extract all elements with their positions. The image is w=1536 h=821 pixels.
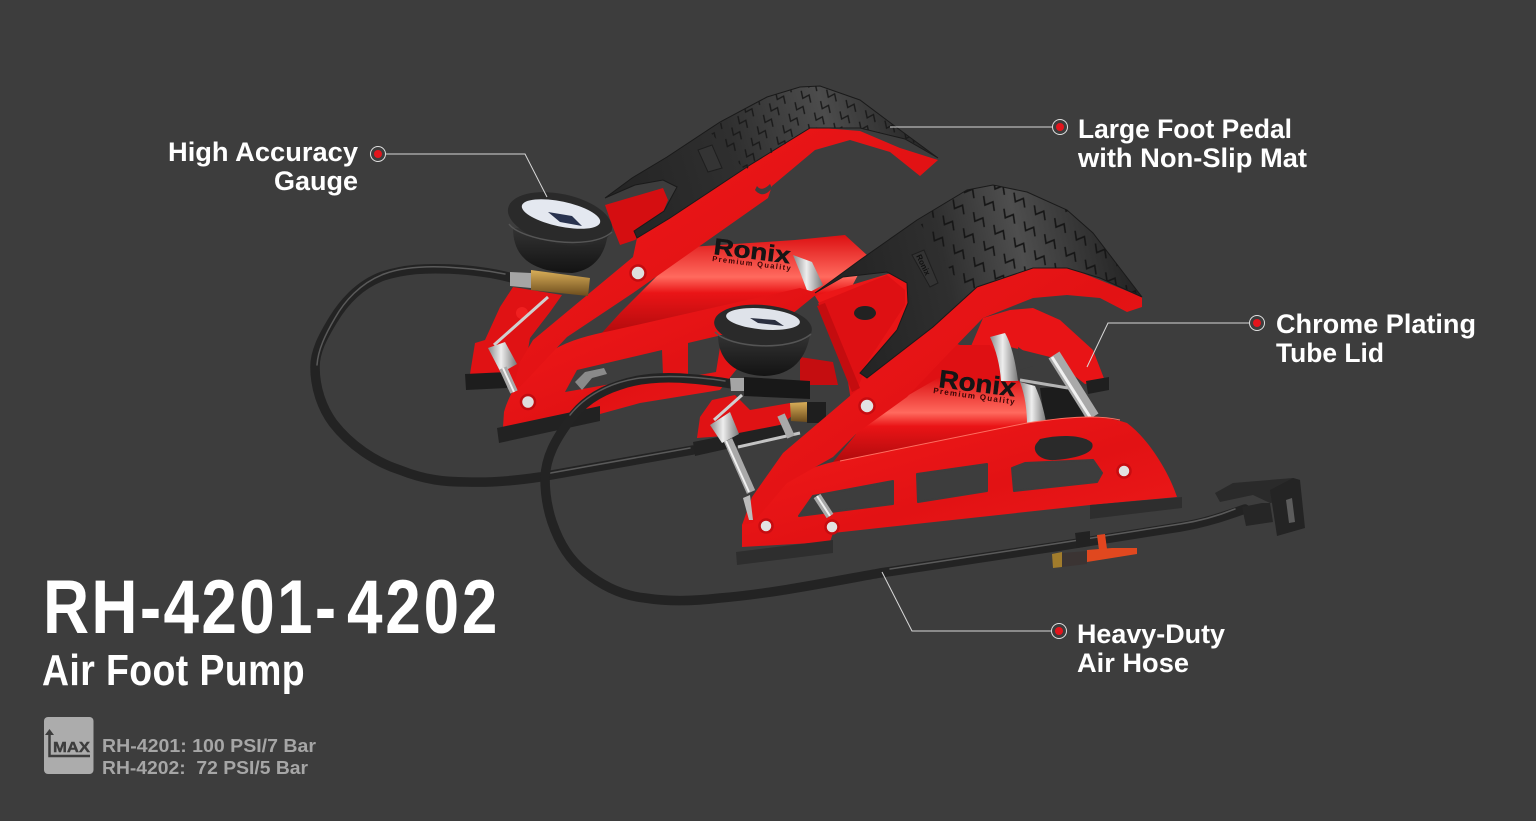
pedal label: Large Foot Pedal	[1078, 114, 1292, 144]
chrome label: Tube Lid	[1276, 338, 1384, 368]
rear mat tread	[708, 86, 938, 170]
pressure specs	[102, 736, 316, 778]
front pedal arm	[742, 240, 1142, 525]
front base windows	[799, 460, 1102, 516]
rear spring rod	[488, 297, 548, 392]
front mat tread	[918, 185, 1140, 296]
callout: high accuracy gauge	[168, 137, 547, 197]
callout: heavy-duty air hose	[882, 572, 1225, 678]
front non-slip mat	[815, 185, 1142, 378]
front left far frame	[697, 395, 800, 438]
callout: chrome plating tube lid	[1087, 309, 1476, 368]
pedal leader line	[890, 126, 1052, 128]
chrome leader line	[1087, 323, 1249, 367]
rear frame knob	[516, 307, 528, 319]
rear brass connector	[510, 270, 590, 296]
mat brand badge: Ronix	[914, 253, 932, 277]
rear pedal arm	[513, 127, 938, 388]
rear air hose	[315, 267, 693, 482]
front main cylinder	[833, 377, 1030, 462]
front connector	[730, 377, 810, 399]
icon: max pressure: MAX	[53, 739, 90, 756]
front arc window	[1018, 347, 1033, 370]
rear far side frame	[470, 287, 562, 385]
front base top highlight	[840, 417, 1120, 461]
hose air-tip adapter	[1052, 531, 1137, 568]
front pressure gauge	[712, 301, 814, 376]
rear base windows	[565, 350, 663, 392]
front pivot bolts	[760, 398, 1130, 534]
front chrome lid one	[990, 333, 1018, 381]
hose marker	[1052, 624, 1066, 638]
front base plate	[742, 417, 1177, 547]
rear base plate	[503, 288, 818, 427]
front foot pump	[693, 185, 1182, 565]
pressure specs: RH-4201: 100 PSI/7 Bar	[102, 736, 316, 756]
rear pivot bolts	[521, 266, 646, 409]
rear foot pump	[465, 86, 938, 443]
front rear-side foot	[1086, 377, 1109, 394]
front rubber plug	[1035, 436, 1093, 460]
rear arm notch	[755, 184, 772, 194]
hose label: Air Hose	[1077, 648, 1189, 678]
rear mat badge	[698, 145, 722, 172]
hose pump head	[1215, 478, 1305, 536]
hose leader line	[882, 572, 1051, 631]
rear logo: Premium Quality	[712, 254, 792, 273]
front foot pads	[736, 497, 1182, 565]
chrome label: Chrome Plating	[1276, 309, 1476, 339]
front logo: Premium Quality	[933, 386, 1016, 406]
gauge label	[168, 137, 358, 196]
rear logo: Ronix	[712, 233, 792, 268]
pressure specs: RH-4202: 72 PSI/5 Bar	[102, 758, 308, 778]
front rear-side frame arc	[960, 308, 1105, 384]
front chrome rod	[1020, 355, 1093, 417]
rear pedal opening	[605, 188, 668, 245]
hose label: Heavy-Duty	[1077, 619, 1225, 649]
front inner cylinder	[840, 322, 1030, 462]
front air hose	[545, 377, 1245, 601]
callout: large foot pedal	[890, 114, 1307, 173]
rear far foot	[465, 372, 507, 390]
front chrome lid two	[1020, 382, 1046, 424]
hose label	[1077, 619, 1225, 678]
rear pressure gauge	[503, 184, 617, 273]
gauge marker	[370, 146, 386, 162]
chrome label	[1276, 309, 1476, 368]
title: model number: 4202	[347, 564, 497, 649]
gauge label: Gauge	[274, 166, 358, 196]
front far foot	[693, 424, 785, 456]
rear pump cylinder	[600, 235, 868, 335]
title: model number	[43, 564, 497, 649]
front pedal opening	[818, 275, 905, 392]
rear base clip	[575, 368, 607, 390]
gauge label: High Accuracy	[168, 137, 358, 167]
icon: max pressure	[44, 717, 94, 774]
rear non-slip mat	[605, 86, 938, 238]
title: model number: RH-4201-	[43, 564, 336, 649]
front link arm	[817, 303, 860, 392]
chrome marker	[1250, 316, 1264, 330]
front spring rod	[710, 395, 800, 520]
front logo: Ronix	[937, 365, 1017, 402]
front dark fittings	[790, 357, 1085, 424]
subtitle: Air Foot Pump	[42, 645, 305, 695]
pedal marker	[1052, 120, 1068, 134]
pedal label: with Non-Slip Mat	[1077, 143, 1307, 173]
gauge leader line	[386, 154, 547, 197]
front window link rod	[817, 496, 830, 516]
rear foot pad	[497, 406, 600, 443]
front knob behind opening	[854, 306, 876, 320]
rear cylinder chrome lid	[793, 255, 823, 293]
pedal label	[1077, 114, 1307, 173]
mat brand badge	[912, 250, 938, 287]
